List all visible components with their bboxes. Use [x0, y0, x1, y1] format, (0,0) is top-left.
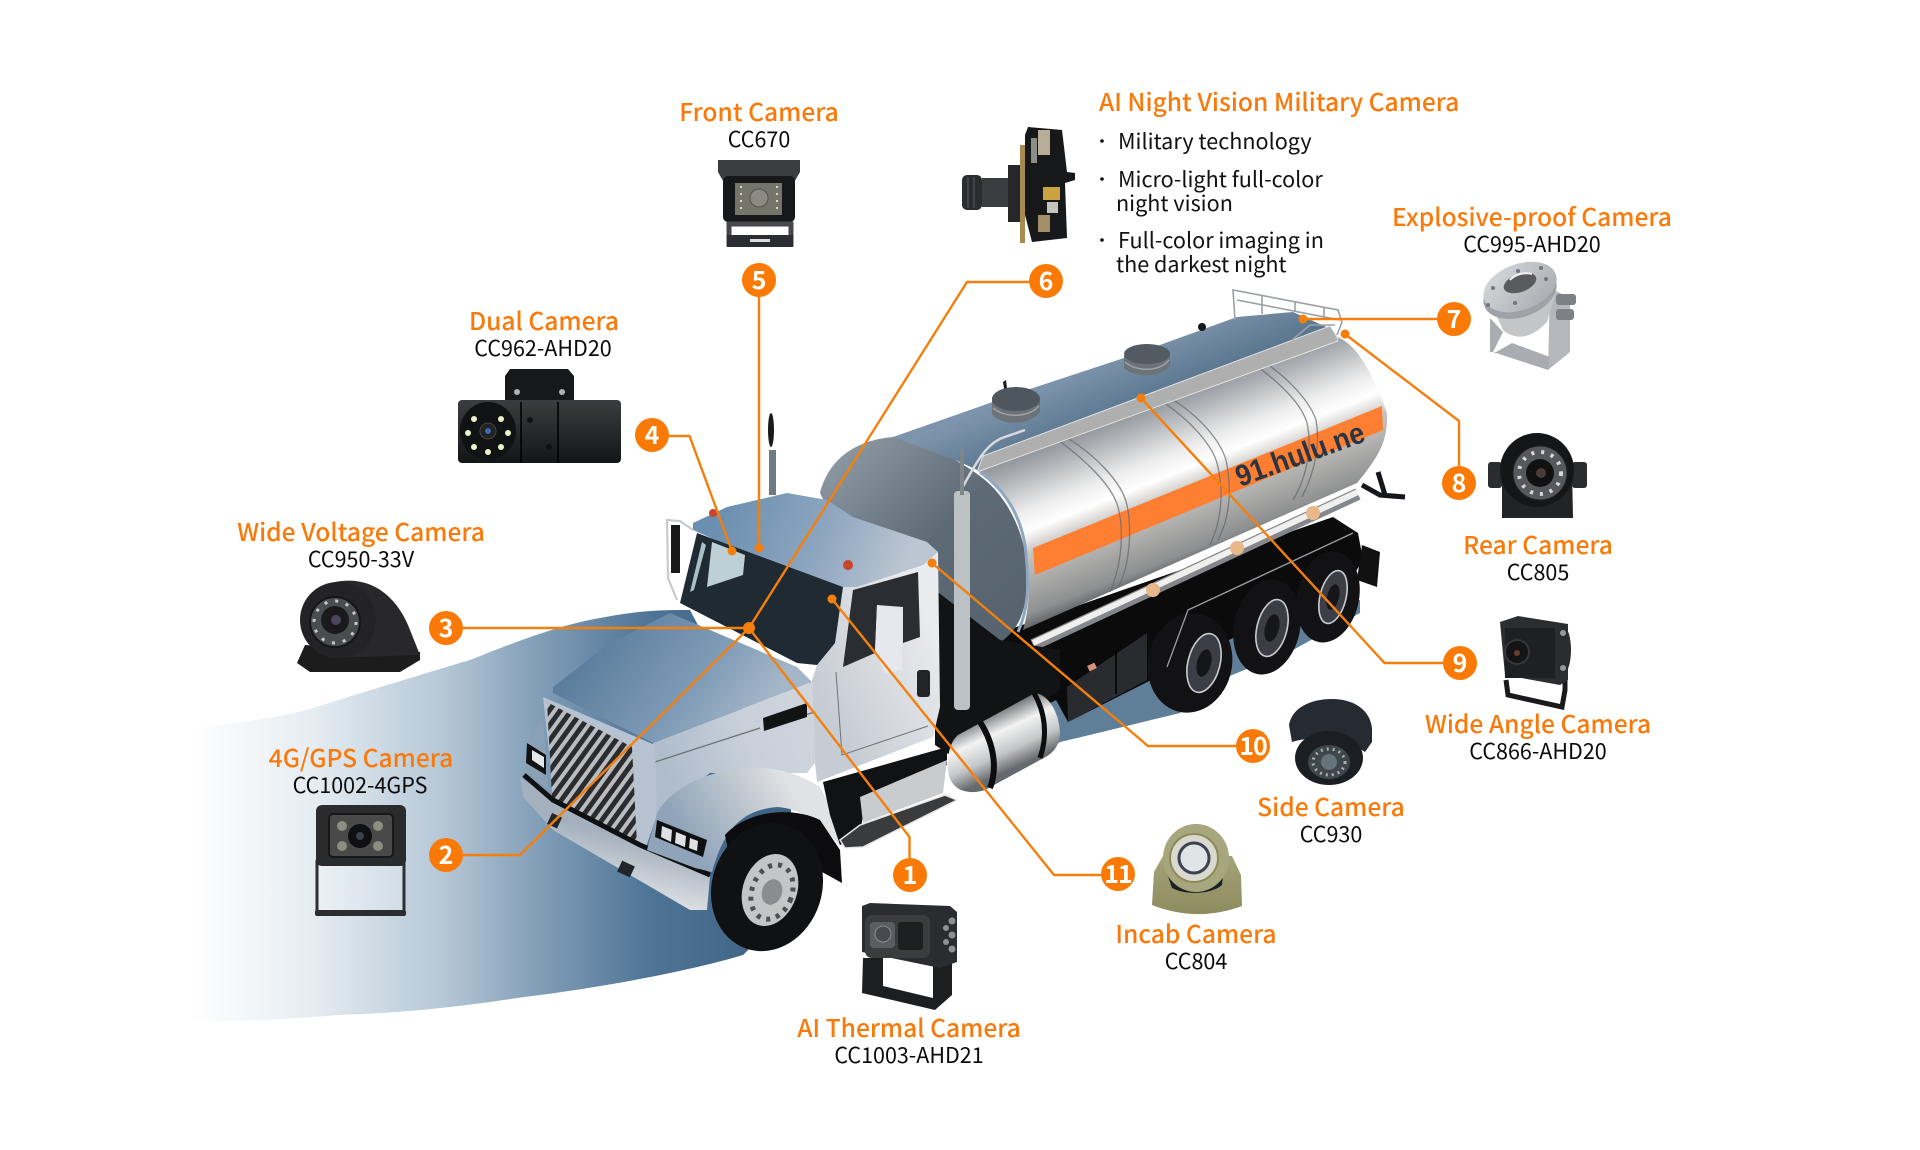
- hood vent: [763, 703, 807, 731]
- wheel arch: [725, 812, 842, 890]
- label: explosive-proof camera: [1392, 198, 1672, 259]
- badge 9: 9: [1453, 644, 1467, 680]
- door outline: [836, 672, 928, 755]
- cab roof: [693, 493, 938, 587]
- cab antenna: [768, 413, 776, 495]
- camera face disc: [1476, 257, 1564, 329]
- frame edge line: [1167, 533, 1353, 667]
- label: AI thermal camera: [797, 1009, 1021, 1070]
- label: wide voltage camera: Wide Voltage Camera: [237, 513, 485, 549]
- side mirror: [875, 605, 902, 673]
- side pipe: [1033, 492, 1358, 645]
- dome shell: [1289, 699, 1372, 752]
- badge 11: 11: [1104, 855, 1132, 891]
- rear guard rail: [1233, 290, 1342, 340]
- icon: night vision module: [962, 127, 1075, 243]
- leader line 9: [1141, 398, 1460, 663]
- label: side camera: [1257, 788, 1405, 849]
- label: front camera: Front Camera: [679, 93, 839, 129]
- label: wide angle camera: Wide Angle Camera: [1425, 705, 1651, 741]
- lens ring: [1308, 745, 1350, 779]
- leader line 7: [1303, 318, 1454, 320]
- icon: incab camera CC804: [1152, 824, 1242, 914]
- windshield reflection: [707, 542, 745, 587]
- orange stripe: [1033, 406, 1383, 575]
- cable glands: [1556, 294, 1576, 320]
- cab steps: [823, 747, 957, 848]
- roof beacons: [709, 509, 853, 570]
- label: wide voltage camera: CC950-33V: [308, 543, 415, 574]
- badge 5: [742, 261, 776, 297]
- heading: AI night vision military camera: AI Night Vision Military Camera: [1099, 83, 1459, 119]
- label: rear camera: CC805: [1507, 556, 1569, 587]
- badge 9: [1443, 644, 1477, 680]
- camera bowl: [1493, 292, 1556, 337]
- mounting bracket: [862, 958, 952, 1010]
- left fender and headlight: [526, 720, 548, 790]
- tank front face: [820, 437, 1027, 680]
- label: front camera: [679, 93, 839, 154]
- icon: wide voltage camera CC950-33V: [297, 581, 420, 672]
- bracket back plate: [1548, 288, 1570, 370]
- label: 4G/GPS camera: 4G/GPS Camera: [269, 739, 453, 775]
- badge 4: [635, 416, 669, 452]
- leader line 2: [446, 628, 749, 855]
- grille frame: [543, 697, 657, 850]
- feature bullet list: night vision: [1116, 187, 1233, 218]
- icon: dual camera CC962-AHD20: [458, 369, 621, 463]
- feature bullet list: Micro-light full-color: [1118, 163, 1323, 194]
- badge 8: 8: [1452, 464, 1466, 500]
- windshield: [680, 533, 843, 665]
- icon: AI thermal camera CC1003-AHD21: [862, 903, 957, 1010]
- silver tank body: [977, 337, 1387, 630]
- hood top: [553, 613, 812, 743]
- IR LEDs: [943, 918, 956, 952]
- leader endpoint dots: [728, 314, 1350, 634]
- icon: side camera CC930: [1289, 699, 1372, 785]
- left mirror: [667, 520, 693, 600]
- hood crease line: [655, 712, 815, 762]
- icon: explosive-proof camera CC995-AHD20: [1476, 252, 1576, 370]
- tank hatch covers: [992, 323, 1206, 423]
- tank walkway rail: [977, 326, 1338, 472]
- icon: wide angle camera CC866-AHD20: [1500, 616, 1571, 707]
- icon: 4G/GPS camera CC1002-4GPS: [315, 805, 406, 916]
- front rim highlight: [980, 472, 1028, 632]
- label: explosive-proof camera: CC995-AHD20: [1463, 228, 1601, 259]
- front bumper: [520, 775, 710, 910]
- leader line 3: [446, 627, 749, 629]
- thermal lens: [870, 922, 895, 948]
- label: AI thermal camera: AI Thermal Camera: [797, 1009, 1021, 1045]
- leader line 10: [932, 563, 1253, 746]
- badge 6: [1029, 262, 1063, 298]
- label: rear camera: Rear Camera: [1463, 526, 1613, 562]
- leader line 6: [749, 282, 1046, 628]
- visible lens: [898, 922, 923, 950]
- label: explosive-proof camera: Explosive-proof Camera: [1392, 198, 1672, 234]
- feature bullet list: Full-color imaging in: [1118, 224, 1324, 255]
- lower ball: [1295, 731, 1363, 785]
- feature bullet list: Military technology: [1118, 125, 1312, 156]
- badge 7: 7: [1447, 300, 1461, 336]
- exhaust stack: [954, 430, 1025, 710]
- feature bullet list: [1100, 125, 1324, 279]
- tank brand lettering: 91.hulu.ne: [1231, 416, 1369, 494]
- label: incab camera: CC804: [1165, 945, 1227, 976]
- pipe fittings: [1146, 506, 1320, 597]
- tanker truck: [520, 290, 1405, 966]
- lens panel: [865, 915, 930, 958]
- badge 5: 5: [752, 261, 766, 297]
- badge 7: [1437, 300, 1471, 336]
- label: dual camera: [469, 302, 619, 363]
- right headlight: [655, 820, 707, 857]
- lens opening: [1501, 269, 1539, 297]
- label: wide angle camera: CC866-AHD20: [1469, 735, 1607, 766]
- mud flap: [1357, 545, 1380, 587]
- label: side camera: Side Camera: [1257, 788, 1405, 824]
- badge 3: [429, 609, 463, 645]
- label: dual camera: Dual Camera: [469, 302, 619, 338]
- label: incab camera: [1115, 915, 1277, 976]
- leader line 5: [758, 280, 760, 548]
- badge 2: 2: [439, 836, 453, 872]
- leader line 11: [832, 599, 1118, 875]
- badge 1: 1: [903, 856, 917, 892]
- leader line 1: [749, 628, 910, 875]
- front wheel: [695, 808, 839, 966]
- cab side and door: [812, 552, 940, 782]
- grille bars: [547, 702, 637, 845]
- leader line 8: [1345, 334, 1459, 483]
- label: front camera: CC670: [728, 123, 790, 154]
- badge 6: 6: [1039, 262, 1053, 298]
- tool box: [1067, 633, 1147, 722]
- fuel tank: [948, 693, 1060, 792]
- label: side camera: CC930: [1300, 818, 1362, 849]
- camera housing: [862, 903, 957, 968]
- hood side panel: [653, 682, 815, 813]
- tank top surface: [893, 312, 1337, 470]
- label: AI thermal camera: CC1003-AHD21: [834, 1039, 984, 1070]
- rear wheels: [1139, 546, 1368, 721]
- disc bolts: [1486, 266, 1548, 307]
- badge 10: 10: [1239, 727, 1267, 763]
- door handle: [917, 670, 930, 697]
- fender: [647, 768, 840, 872]
- door window: [843, 572, 920, 667]
- label: dual camera: CC962-AHD20: [474, 332, 612, 363]
- ground shadow with blue fade: [190, 610, 800, 1021]
- frame behind cab: [935, 590, 1060, 755]
- label: incab camera: Incab Camera: [1115, 915, 1277, 951]
- badge 4: 4: [645, 416, 660, 452]
- badge 2: [429, 836, 463, 872]
- badge 3: 3: [439, 609, 453, 645]
- badge 8: [1442, 464, 1476, 500]
- leader line 4: [652, 436, 732, 551]
- tank band rings: [1058, 364, 1317, 592]
- label: wide voltage camera: [237, 513, 485, 574]
- label: rear camera: [1463, 526, 1613, 587]
- icon: rear camera CC805: [1488, 433, 1587, 518]
- chassis frame: [950, 517, 1363, 755]
- feature bullet list: the darkest night: [1116, 248, 1287, 279]
- rear ground shadow: [1050, 600, 1360, 750]
- label: wide angle camera: [1425, 705, 1651, 766]
- label: 4G/GPS camera: [269, 739, 453, 800]
- label: 4G/GPS camera: CC1002-4GPS: [293, 769, 427, 800]
- bracket base and leg: [1490, 318, 1550, 370]
- badge 1: [893, 856, 927, 892]
- rear nozzle: [1362, 472, 1405, 497]
- icon: front camera CC670: [718, 160, 800, 247]
